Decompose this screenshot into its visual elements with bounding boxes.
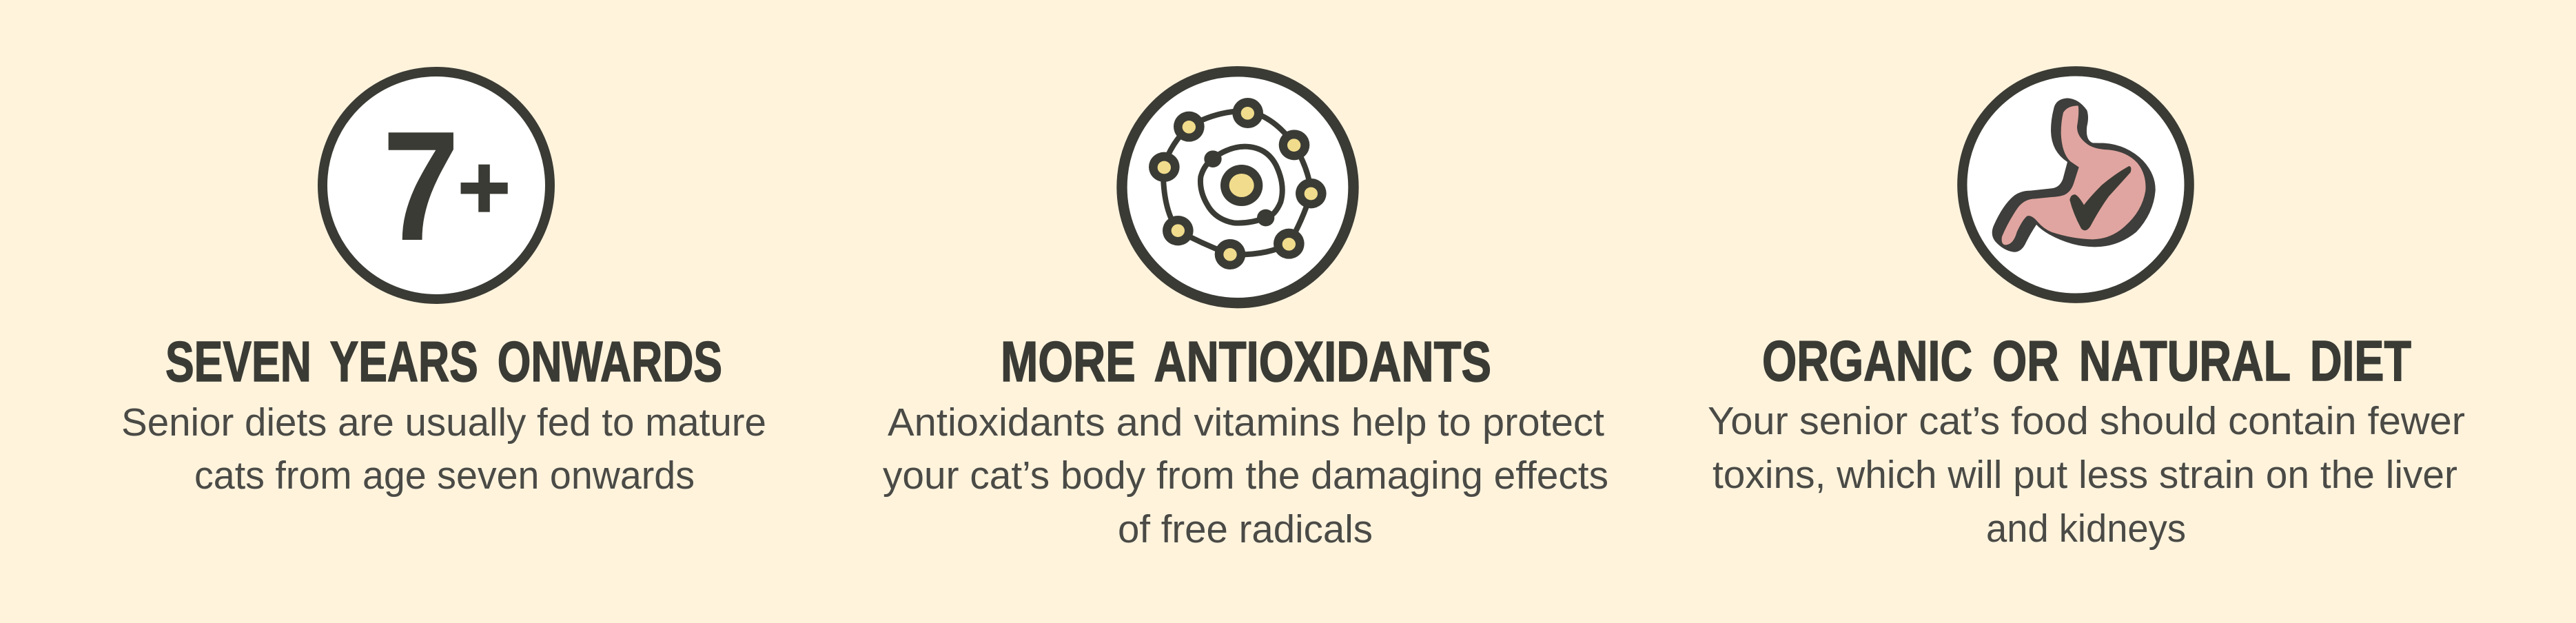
heading: organic or natural diet: ORGANIC OR NATURAL DIET [1762,329,2411,393]
heading: seven years onwards: SEVEN YEARS ONWARDS [165,329,722,394]
icon: 7+ badge: + [458,136,511,238]
text block: antioxidants description [883,400,1608,551]
icon: atom with antioxidants [1122,72,1353,303]
text block: antioxidants description: Antioxidants and vitamins help to protect [888,400,1604,445]
panel: organic or natural diet [1708,71,2465,551]
panel: seven years onwards [121,72,766,498]
panel: more antioxidants [883,72,1608,551]
text block: seven years description: cats from age seven onwards [194,453,695,498]
text block: organic diet description: Your senior cat’s food should contain fewer [1708,399,2465,443]
text block: organic diet description [1708,399,2465,551]
text block: seven years description: Senior diets are usually fed to mature [121,400,766,445]
text block: seven years description [121,400,766,498]
text block: antioxidants description: of free radicals [1118,507,1373,551]
icon: 7+ badge [323,72,550,299]
heading: more antioxidants: MORE ANTIOXIDANTS [1001,329,1491,394]
text block: organic diet description: toxins, which will put less strain on the liver [1713,453,2457,497]
text block: organic diet description: and kidneys [1986,507,2186,551]
icon: 7+ badge: 7 [382,99,460,274]
text block: antioxidants description: your cat’s body from the damaging effects [883,453,1608,498]
icon: stomach with check mark [1962,71,2189,298]
